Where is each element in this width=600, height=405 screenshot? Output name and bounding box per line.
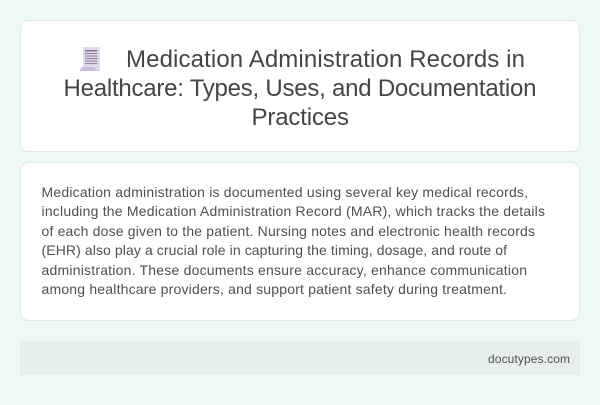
heading: Practices [252, 104, 349, 131]
text block: description: administration. These documents ensure accuracy, enhance communication [42, 262, 527, 278]
footer bar [20, 341, 580, 375]
panel: description card [20, 162, 580, 320]
text block: description: (EHR) also play a crucial role in capturing the timing, dosage, and route of [42, 242, 507, 258]
icon: medication record scroll [80, 47, 100, 71]
footer text: site name: docutypes.com [488, 352, 570, 366]
text block: description: among healthcare providers, and support patient safety during treatment. [42, 281, 507, 297]
text block: description: of each dose given to the patient. Nursing notes and electronic health records [42, 223, 535, 239]
text block: description: including the Medication Administration Record (MAR), which tracks the details [42, 203, 545, 219]
text block: description [42, 184, 545, 297]
heading: Healthcare: Types, Uses, and Documentation [64, 75, 536, 102]
panel: title card [20, 20, 580, 152]
heading [64, 46, 536, 131]
heading: Medication Administration Records in [126, 46, 525, 73]
text block: description: Medication administration is documented using several key medical records, [42, 184, 528, 200]
